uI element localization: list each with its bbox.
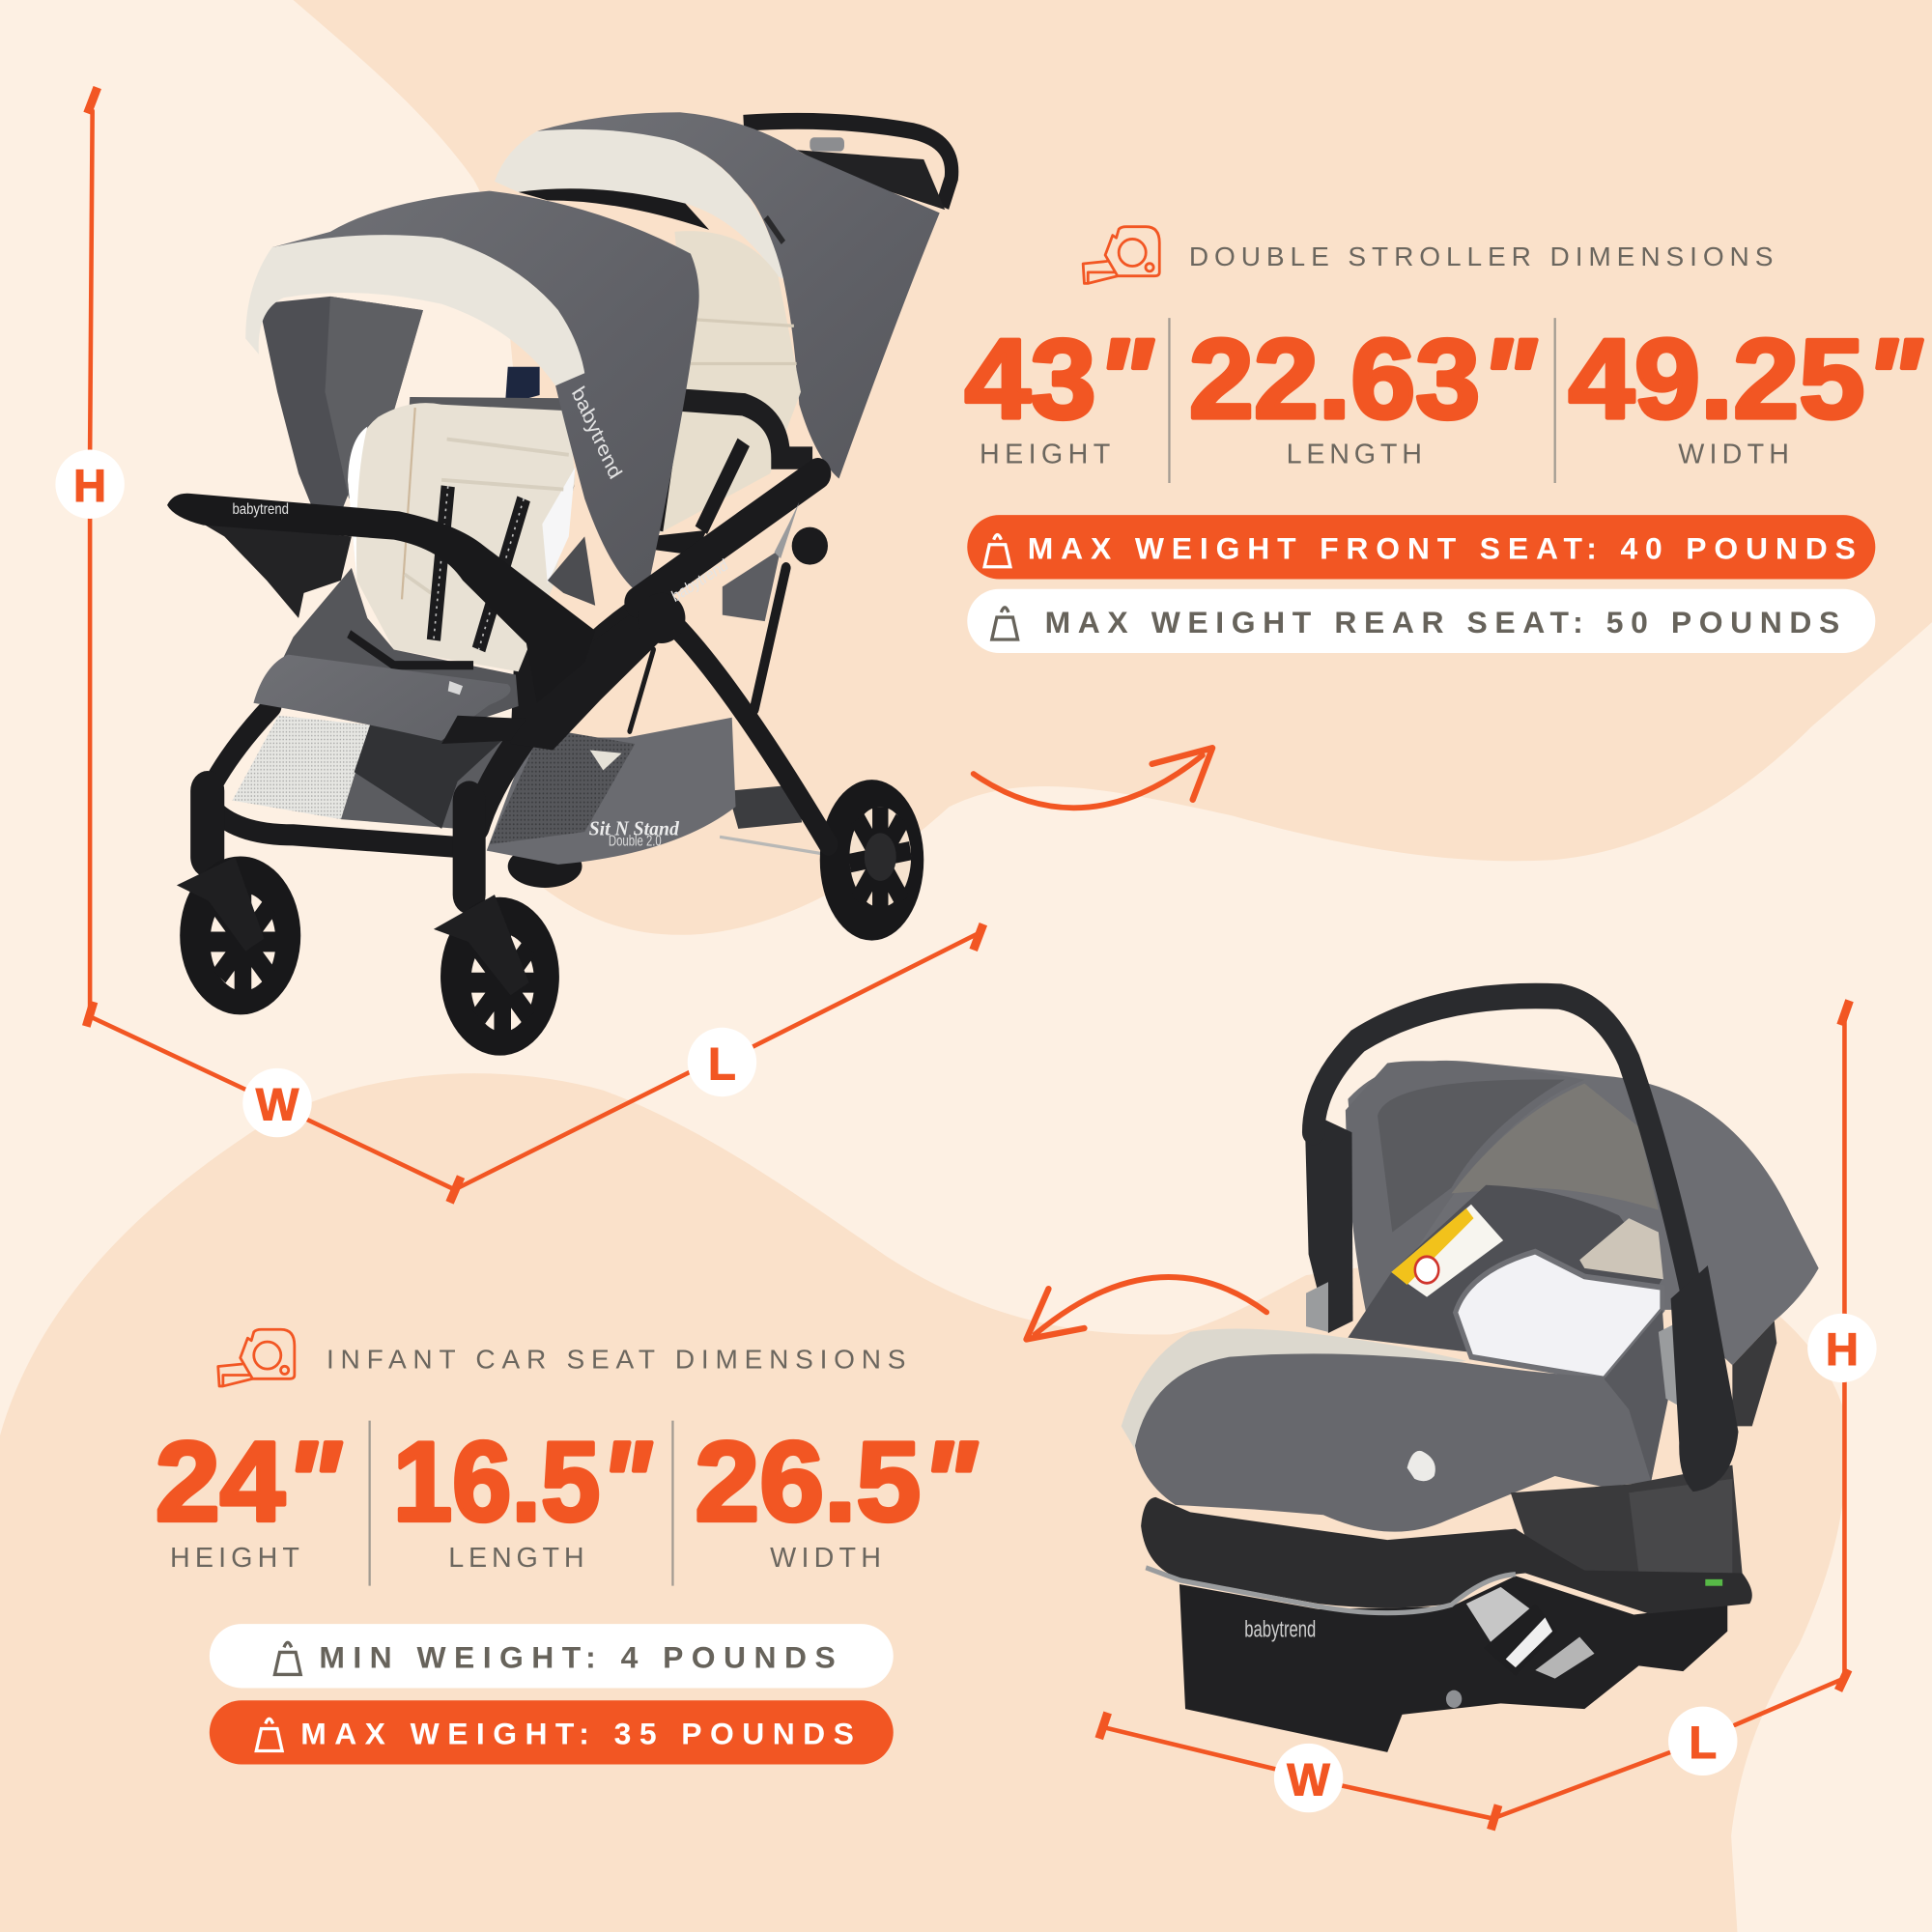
base upper tray (1141, 1497, 1752, 1613)
rear handlebar (744, 121, 952, 210)
L badge car seat: L (1689, 1718, 1717, 1769)
stat: height: 24" (156, 1418, 341, 1545)
arm logo: babytrend (669, 556, 730, 606)
front canopy (245, 191, 699, 594)
background blob: upper peach (294, 0, 1932, 935)
stat: width: 49.25" (1569, 315, 1922, 441)
icon: weight (256, 1719, 282, 1750)
stat: height: HEIGHT (170, 1543, 299, 1574)
main frame arm (638, 473, 828, 643)
pill: min weight (210, 1624, 894, 1688)
cream head pad (1579, 1218, 1663, 1279)
hidden rear-left wheel (508, 845, 582, 888)
H badge stroller (55, 450, 125, 519)
H badge stroller: H (73, 461, 106, 512)
canopy inside (1346, 1061, 1659, 1321)
icon: weight (984, 535, 1010, 567)
icon: tape measure (218, 1329, 295, 1386)
length line (1495, 1678, 1844, 1817)
pill: max weight (210, 1700, 894, 1765)
car seat dimension lines (1099, 1001, 1850, 1830)
rear lower seat (723, 549, 781, 621)
stat: height: 43" (965, 315, 1153, 441)
length line (456, 933, 980, 1189)
icon: weight (992, 608, 1018, 639)
stat: length: LENGTH (1287, 440, 1422, 470)
rear canopy (495, 112, 940, 479)
frame (203, 568, 829, 895)
car seat photo illustration (1122, 996, 1819, 1752)
W badge car seat (1274, 1744, 1343, 1812)
pill: max weight front seat (967, 515, 1875, 579)
H badge car seat: H (1826, 1324, 1859, 1376)
width line (90, 1016, 453, 1189)
width line (1104, 1727, 1493, 1819)
stroller dimension lines (86, 88, 983, 1203)
panel: double stroller dimensions (965, 227, 1922, 653)
handle (1314, 996, 1738, 1492)
basket under seat (487, 718, 736, 865)
stat: length: 16.5" (393, 1418, 652, 1545)
front seat back (348, 397, 575, 671)
stat: width: WIDTH (770, 1543, 881, 1574)
stat: length: 22.63" (1189, 315, 1537, 441)
canopy logo: babytrend (567, 383, 627, 483)
pill: max weight rear seat: MAX WEIGHT REAR SEAT: 50 POUNDS (1045, 605, 1839, 639)
knob (1446, 1690, 1462, 1708)
L badge stroller (688, 1028, 756, 1096)
arrow to car seat dimensions (1026, 1277, 1266, 1339)
pill: max weight front seat: MAX WEIGHT FRONT SEAT: 40 POUNDS (1028, 530, 1856, 565)
pill: min weight: MIN WEIGHT: 4 POUNDS (319, 1639, 836, 1674)
front right wheel (434, 895, 559, 1056)
front basket (232, 716, 505, 829)
W badge car seat: W (1287, 1754, 1330, 1805)
heading: DOUBLE STROLLER DIMENSIONS (1189, 242, 1773, 271)
basket under seat: Double 2.0 (609, 833, 662, 850)
dividers (1169, 318, 1555, 483)
L badge car seat (1668, 1707, 1737, 1776)
back tower (1511, 1465, 1743, 1574)
front seat cushion (253, 655, 511, 741)
base lower box (1179, 1576, 1727, 1752)
height line (1843, 1016, 1846, 1676)
H badge car seat (1807, 1314, 1877, 1382)
W badge stroller (242, 1068, 312, 1137)
background blob: lower peach (0, 1073, 1847, 1932)
frame junction (510, 609, 665, 751)
front bar with tray (167, 494, 595, 703)
L badge stroller: L (708, 1038, 736, 1090)
stat: width: WIDTH (1678, 440, 1789, 470)
stat: height: HEIGHT (980, 440, 1110, 470)
white insert (1456, 1252, 1662, 1379)
bar logo: babytrend (232, 501, 289, 518)
dividers (370, 1421, 672, 1586)
icon: weight (274, 1642, 300, 1674)
panel: infant car seat dimensions (156, 1329, 978, 1765)
basket text: Sit N Stand (589, 818, 680, 840)
pill: max weight: MAX WEIGHT: 35 POUNDS (300, 1716, 854, 1750)
front harness straps (349, 486, 524, 666)
front seat sides (272, 568, 519, 725)
base logo: babytrend (1244, 1615, 1316, 1642)
foot cover (1122, 1310, 1668, 1532)
rear seat pad (654, 231, 801, 536)
e-grip back shell (1732, 1321, 1776, 1426)
stat: length: LENGTH (448, 1543, 584, 1574)
left handle arm (1305, 1110, 1353, 1333)
icon: tape measure (1083, 227, 1159, 283)
front canopy interior (259, 297, 423, 546)
front left wheel (177, 856, 300, 1014)
warning label (1391, 1205, 1503, 1297)
heading: INFANT CAR SEAT DIMENSIONS (327, 1344, 905, 1374)
rear seat lines (691, 320, 797, 363)
inner pad (1348, 1185, 1663, 1377)
belt clip (1466, 1587, 1595, 1679)
stat: width: 26.5" (695, 1418, 978, 1545)
arrow to stroller dimensions (974, 748, 1212, 808)
rear buckle (505, 367, 540, 405)
seat support bar (441, 716, 526, 744)
pill: max weight rear seat (967, 589, 1875, 653)
rear right wheel (820, 780, 923, 941)
height line (90, 111, 93, 1012)
W badge stroller: W (256, 1079, 299, 1130)
rear canopy (1348, 1061, 1819, 1365)
rear foot plate (727, 784, 802, 829)
stroller photo illustration (167, 112, 952, 1056)
rear bar and straps (648, 398, 812, 555)
green level indicator (1705, 1579, 1722, 1586)
